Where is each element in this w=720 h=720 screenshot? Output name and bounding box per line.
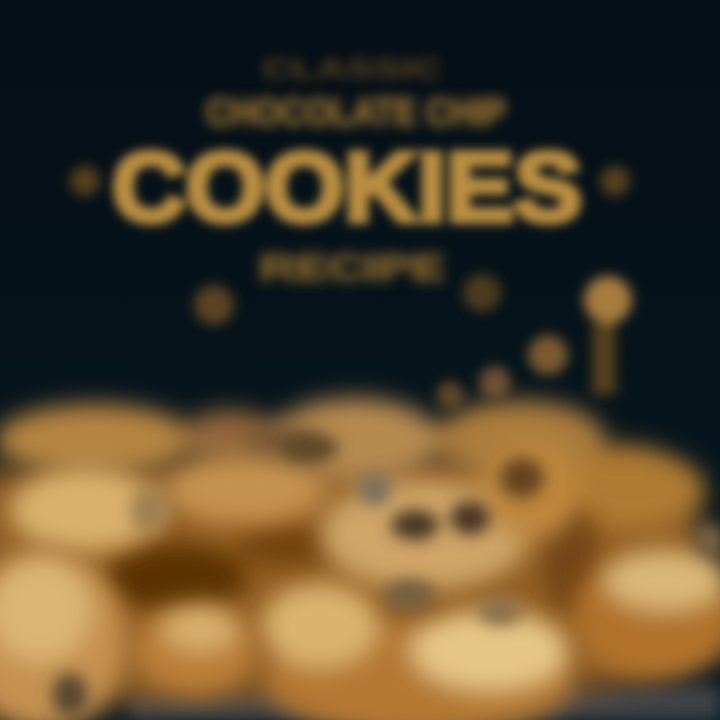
cookie pile	[0, 398, 720, 720]
heading: COOKIES: COOKIES	[112, 132, 582, 242]
middle cookies	[10, 440, 720, 695]
heading: subline: RECIPE	[260, 247, 444, 288]
decorative flanks of heading	[70, 166, 630, 196]
base glow under cookies	[0, 450, 720, 720]
middle shadows	[103, 427, 598, 615]
heading: second line: CHOCOLATE CHIP	[206, 92, 506, 134]
table surface	[130, 685, 720, 720]
heading: top line: CLASSIC	[262, 53, 442, 84]
floating crumbs	[194, 274, 632, 409]
back row cookies	[0, 398, 705, 530]
chocolate chips	[52, 433, 720, 717]
front cookies	[0, 550, 575, 720]
